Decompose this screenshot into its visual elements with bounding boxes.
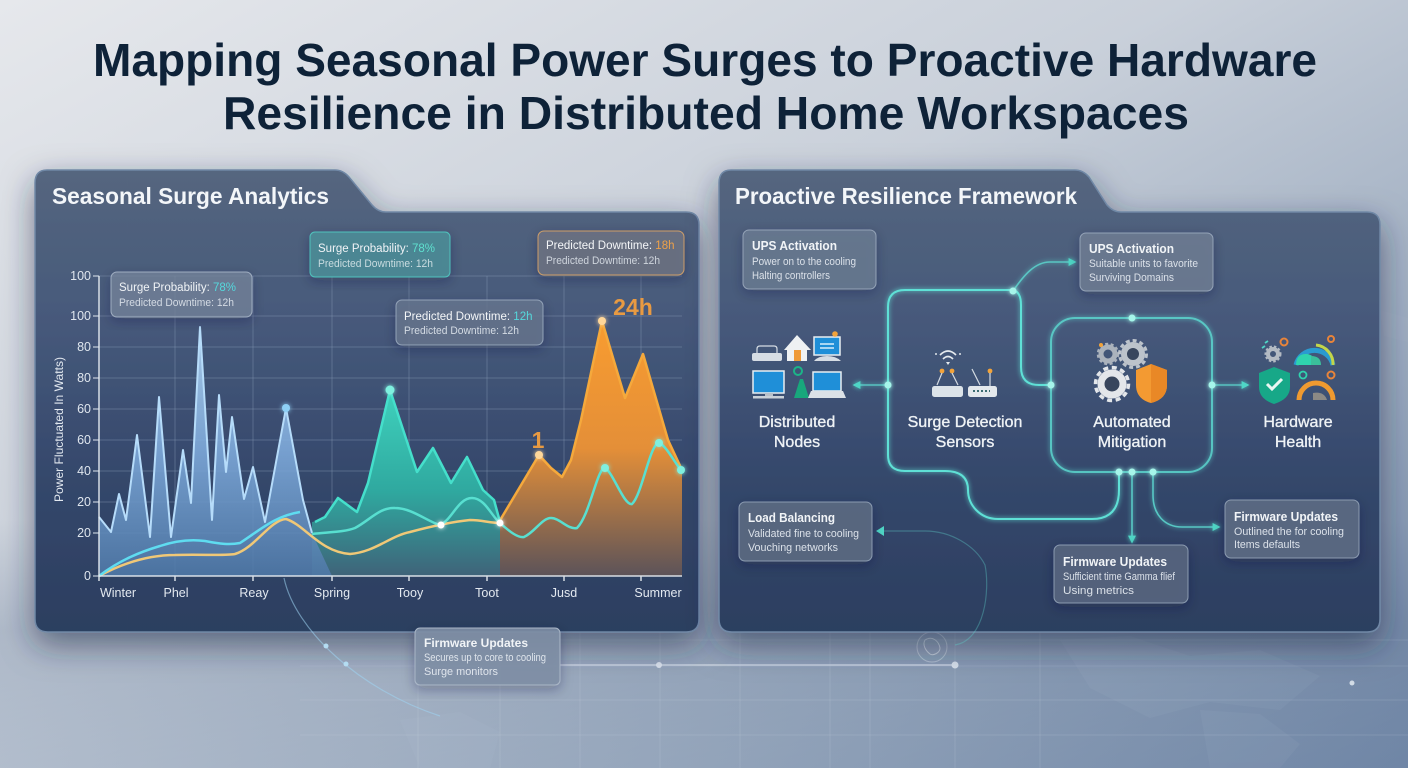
circuit nodes: [884, 288, 1216, 476]
background lower shading: [0, 520, 1408, 768]
arc markers below chart: [324, 644, 348, 666]
card: ups activation right: Suitable units to favorite: [1089, 258, 1198, 270]
area: orange summer: [499, 321, 682, 576]
peak labels: 1: [532, 427, 545, 453]
area: teal spring: [312, 390, 500, 576]
card: ups activation right: Surviving Domains: [1089, 272, 1174, 284]
callout: firmware updates below chart: Secures up to core to cooling: [424, 652, 546, 664]
callout: firmware updates below chart: Surge monitors: [424, 666, 498, 678]
y axis labels: 60: [77, 402, 91, 416]
y axis labels: 20: [77, 526, 91, 540]
callout: predicted downtime orange: Predicted Downtime: 12h: [546, 255, 660, 267]
card: load balancing: Vouching networks: [748, 542, 838, 554]
x axis labels: Reay: [239, 586, 269, 600]
data points: [282, 317, 685, 528]
x axis labels: Phel: [163, 586, 189, 600]
x axis labels: Toot: [475, 586, 499, 600]
x axis labels: Spring: [314, 586, 350, 600]
card: firmware updates right: Firmware Updates: [1234, 510, 1338, 524]
circuit connectors: [854, 262, 1248, 542]
background grid and map decoration: [300, 295, 1408, 768]
icon: surge detection sensors: [932, 351, 997, 397]
card: firmware updates center: Using metrics: [1063, 585, 1135, 597]
callout: predicted downtime middle: Predicted Downtime: 12h: [404, 311, 532, 323]
icon: gears and shield: [1096, 340, 1167, 403]
card: load balancing: [739, 502, 872, 561]
line: cyan: [99, 512, 300, 576]
icon: distributed nodes devices: [752, 331, 846, 398]
card: firmware updates right: [1225, 500, 1359, 558]
label: hardware health: [1263, 414, 1333, 451]
x axis labels: Jusd: [551, 586, 577, 600]
label: distributed nodes: Distributed: [759, 414, 835, 431]
callout: predicted downtime middle: Predicted Downtime: 12h: [404, 325, 519, 337]
line: yellow: [99, 519, 500, 576]
y axis labels: 0: [84, 569, 91, 583]
callout: surge probability teal: Surge Probability: 78%: [318, 243, 435, 255]
label: surge detection sensors: Surge Detection: [908, 414, 1022, 431]
callout: predicted downtime middle: [396, 300, 543, 345]
label: distributed nodes: [759, 414, 835, 451]
y axis labels: 40: [77, 464, 91, 478]
card: ups activation left: Halting controllers: [752, 270, 830, 282]
callout: surge probability left: Predicted Downtime: 12h: [119, 297, 234, 309]
callout: predicted downtime orange: Predicted Downtime: 18h: [546, 240, 674, 252]
card: firmware updates center: [1054, 545, 1188, 603]
x axis labels: Winter: [100, 586, 136, 600]
card: firmware updates right: Items defaults: [1234, 539, 1300, 551]
heading: seasonal surge analytics: Seasonal Surge Analytics: [52, 183, 329, 209]
peak labels: [532, 294, 653, 453]
area: blue winter: [99, 327, 332, 576]
axis lines: [99, 276, 682, 581]
card: firmware updates center: Sufficient time Gamma flief: [1063, 571, 1176, 583]
label: hardware health: Hardware: [1263, 414, 1333, 431]
y axis labels: 80: [77, 340, 91, 354]
card: load balancing: Validated fine to cooling: [748, 528, 859, 540]
callout: surge probability left: [111, 272, 252, 317]
label: surge detection sensors: Sensors: [936, 434, 994, 451]
label: automated mitigation: [1093, 414, 1171, 451]
title: Mapping Seasonal Power Surges to Proactive Hardware: [93, 34, 1317, 86]
y axis labels: 100: [70, 269, 91, 283]
heading: proactive resilience framework: Proactive Resilience Framework: [735, 183, 1077, 209]
peak labels: 24h: [613, 294, 653, 320]
label: automated mitigation: Mitigation: [1098, 434, 1166, 451]
panel: seasonal surge analytics: [35, 170, 699, 716]
card: ups activation left: Power on to the cooling: [752, 256, 856, 268]
x axis labels: Summer: [634, 586, 682, 600]
card: ups activation right: [1080, 233, 1213, 291]
y axis labels: 20: [77, 495, 91, 509]
label: distributed nodes: Nodes: [774, 434, 820, 451]
label: automated mitigation: Automated: [1093, 414, 1171, 431]
callout: firmware updates below chart: Firmware Updates: [424, 636, 528, 650]
card: ups activation right: UPS Activation: [1089, 242, 1174, 256]
faint arc crossing the panel: [284, 578, 440, 716]
callout: surge probability teal: [310, 232, 450, 277]
callout: surge probability left: Surge Probability: 78%: [119, 282, 236, 294]
callout: surge probability teal: Predicted Downtime: 12h: [318, 258, 433, 270]
card: ups activation left: UPS Activation: [752, 239, 837, 253]
chart: power fluctuation by season: [52, 269, 685, 716]
card: ups activation left: [743, 230, 876, 289]
y axis labels: [70, 269, 99, 583]
faint connector to load balancing: [877, 531, 987, 645]
card: firmware updates right: Outlined the for cooling: [1234, 526, 1344, 538]
callout: predicted downtime orange: [538, 231, 684, 275]
y axis title: Power Fluctuated In Watts): [52, 357, 66, 502]
x axis labels: Tooy: [397, 586, 424, 600]
y axis labels: 60: [77, 433, 91, 447]
title: [93, 34, 1317, 139]
x axis labels: [100, 586, 682, 600]
y axis labels: 100: [70, 309, 91, 323]
y axis labels: 80: [77, 371, 91, 385]
card: load balancing: Load Balancing: [748, 511, 835, 525]
callout: firmware updates below chart: [415, 628, 560, 685]
icon: hardware health: [1259, 336, 1334, 404]
label: surge detection sensors: [908, 414, 1022, 451]
card: firmware updates center: Firmware Updates: [1063, 555, 1167, 569]
label: hardware health: Health: [1275, 434, 1321, 451]
title: Resilience in Distributed Home Workspaces: [223, 87, 1189, 139]
panel: proactive resilience framework: [719, 170, 1380, 645]
